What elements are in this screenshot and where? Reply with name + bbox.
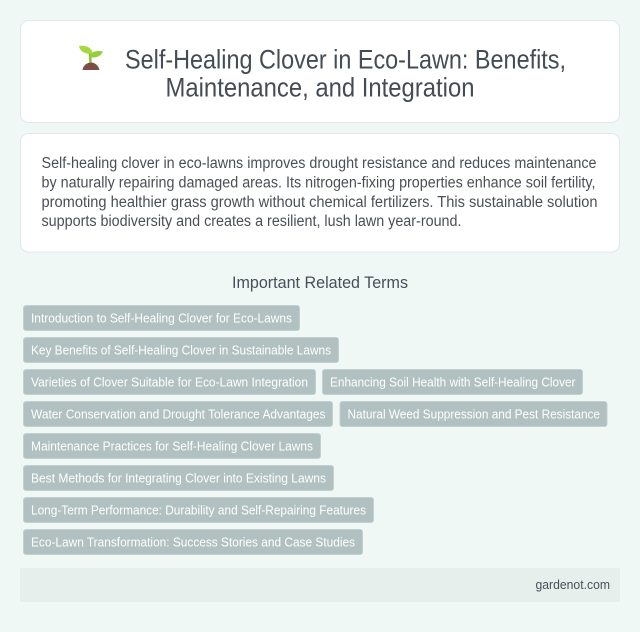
tag [322,370,582,394]
panel: summary card [20,134,620,252]
tag: Best Methods for Integrating Clover into Existing Lawns [31,470,326,486]
summary line 2: by naturally repairing damaged areas. Its nitrogen-fixing properties enhance soil fertility, [42,174,596,192]
heading: important related terms: Important Related Terms [232,273,408,292]
tag: Long-Term Performance: Durability and Self-Repairing Features [31,502,366,518]
tag [24,370,316,394]
footer [20,568,620,602]
summary line 1: Self-healing clover in eco-lawns improves drought resistance and reduces maintenance [42,155,596,172]
tag [24,434,320,458]
summary line 3: promoting healthier grass growth without chemical fertilizers. This sustainable solution [42,194,598,211]
tag: Natural Weed Suppression and Pest Resistance [348,406,600,422]
tag [24,306,300,330]
tag: Eco-Lawn Transformation: Success Stories and Case Studies [31,534,355,550]
tag [24,466,334,490]
tag [24,498,374,522]
tag list [24,306,607,554]
title line 2: Maintenance, and Integration [166,72,474,102]
tag: Key Benefits of Self-Healing Clover in Sustainable Lawns [31,342,331,358]
tag: Enhancing Soil Health with Self-Healing Clover [330,374,576,390]
summary line 4: supports biodiversity and creates a resilient, lush lawn year-round. [42,213,462,230]
icon: seedling [79,46,103,70]
title line 1: Self-Healing Clover in Eco-Lawn: Benefits, [125,44,566,74]
tag: Water Conservation and Drought Tolerance Advantages [31,406,326,422]
footer source: gardenot.com [536,577,610,592]
tag [24,530,362,554]
tag [340,402,607,426]
tag: Varieties of Clover Suitable for Eco-Lawn Integration [31,374,308,390]
tag: Maintenance Practices for Self-Healing Clover Lawns [31,438,313,454]
tag: Introduction to Self-Healing Clover for Eco-Lawns [31,310,292,326]
panel: title card [20,20,620,122]
tag [24,402,332,426]
tag [24,338,338,362]
